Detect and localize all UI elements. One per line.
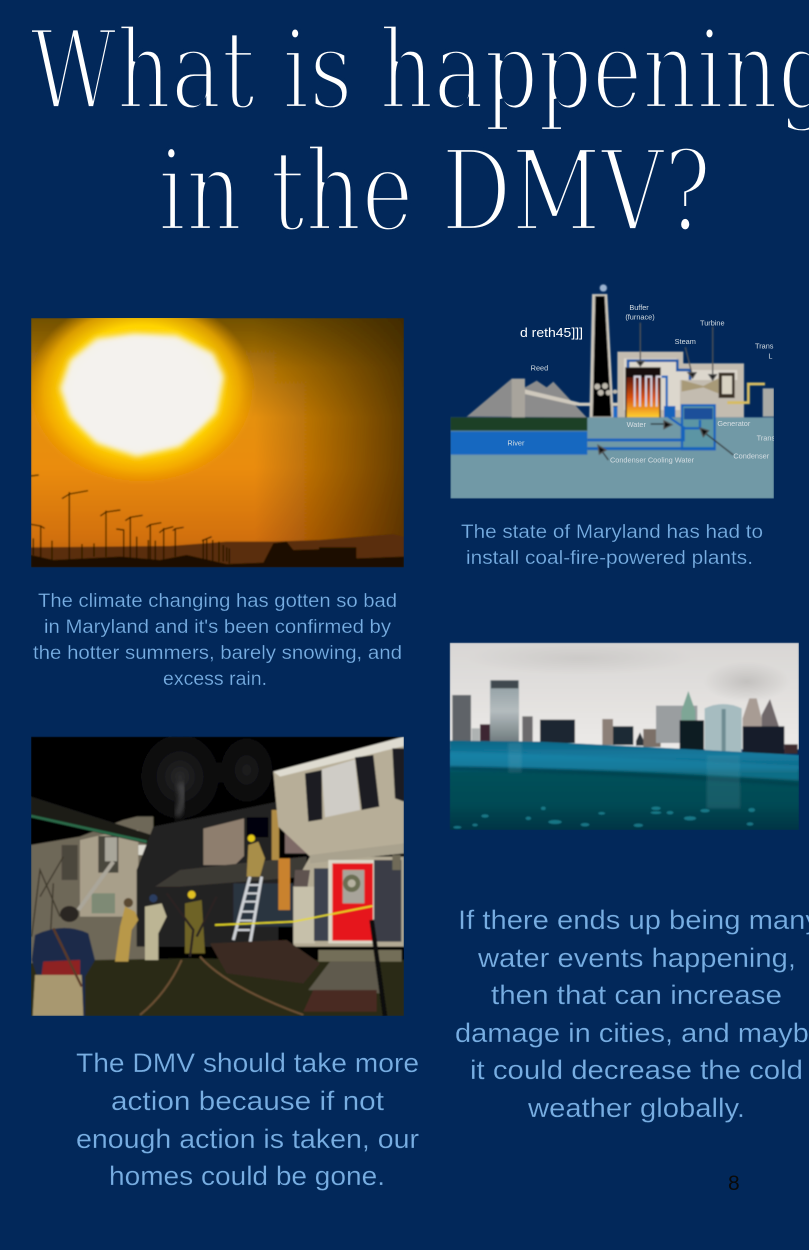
diagram: coal-fired power plant <box>450 284 775 499</box>
title <box>30 6 809 257</box>
diagram labels: L <box>768 352 772 361</box>
right house <box>273 737 404 857</box>
diagram labels: Generator <box>717 419 751 428</box>
caption: climate: The climate changing has gotten so bad <box>38 591 397 612</box>
caption: climate: in Maryland and it's been confirmed by <box>44 617 392 638</box>
caption: take action: action because if not <box>111 1086 385 1116</box>
police tape <box>215 906 373 925</box>
photo: house fire with firefighters <box>31 730 404 1016</box>
diagram labels: Buffer <box>629 303 649 312</box>
caption: coal plants: install coal-fire-powered plants. <box>466 548 753 569</box>
caption: water events: damage in cities, and maybe <box>455 1018 809 1048</box>
caption: water events: then that can increase <box>491 980 782 1010</box>
diagram labels: Condenser Cooling Water <box>610 455 695 464</box>
steam pipes <box>628 361 690 380</box>
diagram labels: Trans <box>757 434 775 443</box>
burned centre <box>137 802 278 947</box>
caption: coal plants: The state of Maryland has had to <box>461 522 763 543</box>
caption: take action: enough action is taken, our <box>76 1124 419 1154</box>
caption: water events: it could decrease the cold <box>470 1055 803 1085</box>
diagram labels: Trans <box>755 341 774 350</box>
caption: water events: If there ends up being many <box>458 905 809 935</box>
coal piles <box>467 379 587 417</box>
water <box>450 741 799 830</box>
caption: take action: homes could be gone. <box>109 1161 385 1191</box>
stack <box>589 294 614 417</box>
firefighter foreground <box>32 928 95 1016</box>
stray label text: d reth45]]] <box>520 326 583 340</box>
pointers <box>598 323 733 460</box>
caption: climate <box>33 591 402 690</box>
yard <box>31 958 404 1016</box>
diagram labels: Steam <box>675 337 696 346</box>
buildings <box>452 695 471 742</box>
turbine <box>682 378 718 393</box>
caption: coal plants <box>461 522 763 569</box>
photo: flooded city skyline <box>450 642 799 830</box>
page number: 8 <box>728 1172 740 1195</box>
smoke <box>141 736 223 822</box>
diagram labels: River <box>507 439 525 448</box>
diagram labels: (furnace) <box>625 312 655 321</box>
diagram labels: Turbine <box>700 318 725 327</box>
ground and water <box>450 417 774 499</box>
left house <box>31 817 153 963</box>
diagram labels <box>507 303 775 464</box>
caption: water events: water events happening, <box>477 943 796 973</box>
plant building <box>617 352 744 417</box>
ladder <box>233 877 262 943</box>
photo: sunset over Maryland <box>27 295 404 567</box>
caption: take action <box>76 1048 419 1191</box>
furnace <box>625 367 661 417</box>
caption: water events: weather globally. <box>527 1093 745 1123</box>
caption: climate: the hotter summers, barely snowing, and <box>33 643 402 664</box>
caption: take action: The DMV should take more <box>76 1048 419 1078</box>
skyline <box>31 534 404 567</box>
diagram labels: Water <box>627 420 646 429</box>
ladder truck <box>31 797 152 845</box>
diagram labels: Condenser <box>733 452 770 461</box>
firefighter on ladder <box>247 842 265 877</box>
caption: climate: excess rain. <box>163 669 267 690</box>
caption: water events <box>455 905 809 1123</box>
diagram labels: Reed <box>531 363 548 372</box>
firefighters <box>115 907 138 962</box>
condenser <box>664 406 675 417</box>
